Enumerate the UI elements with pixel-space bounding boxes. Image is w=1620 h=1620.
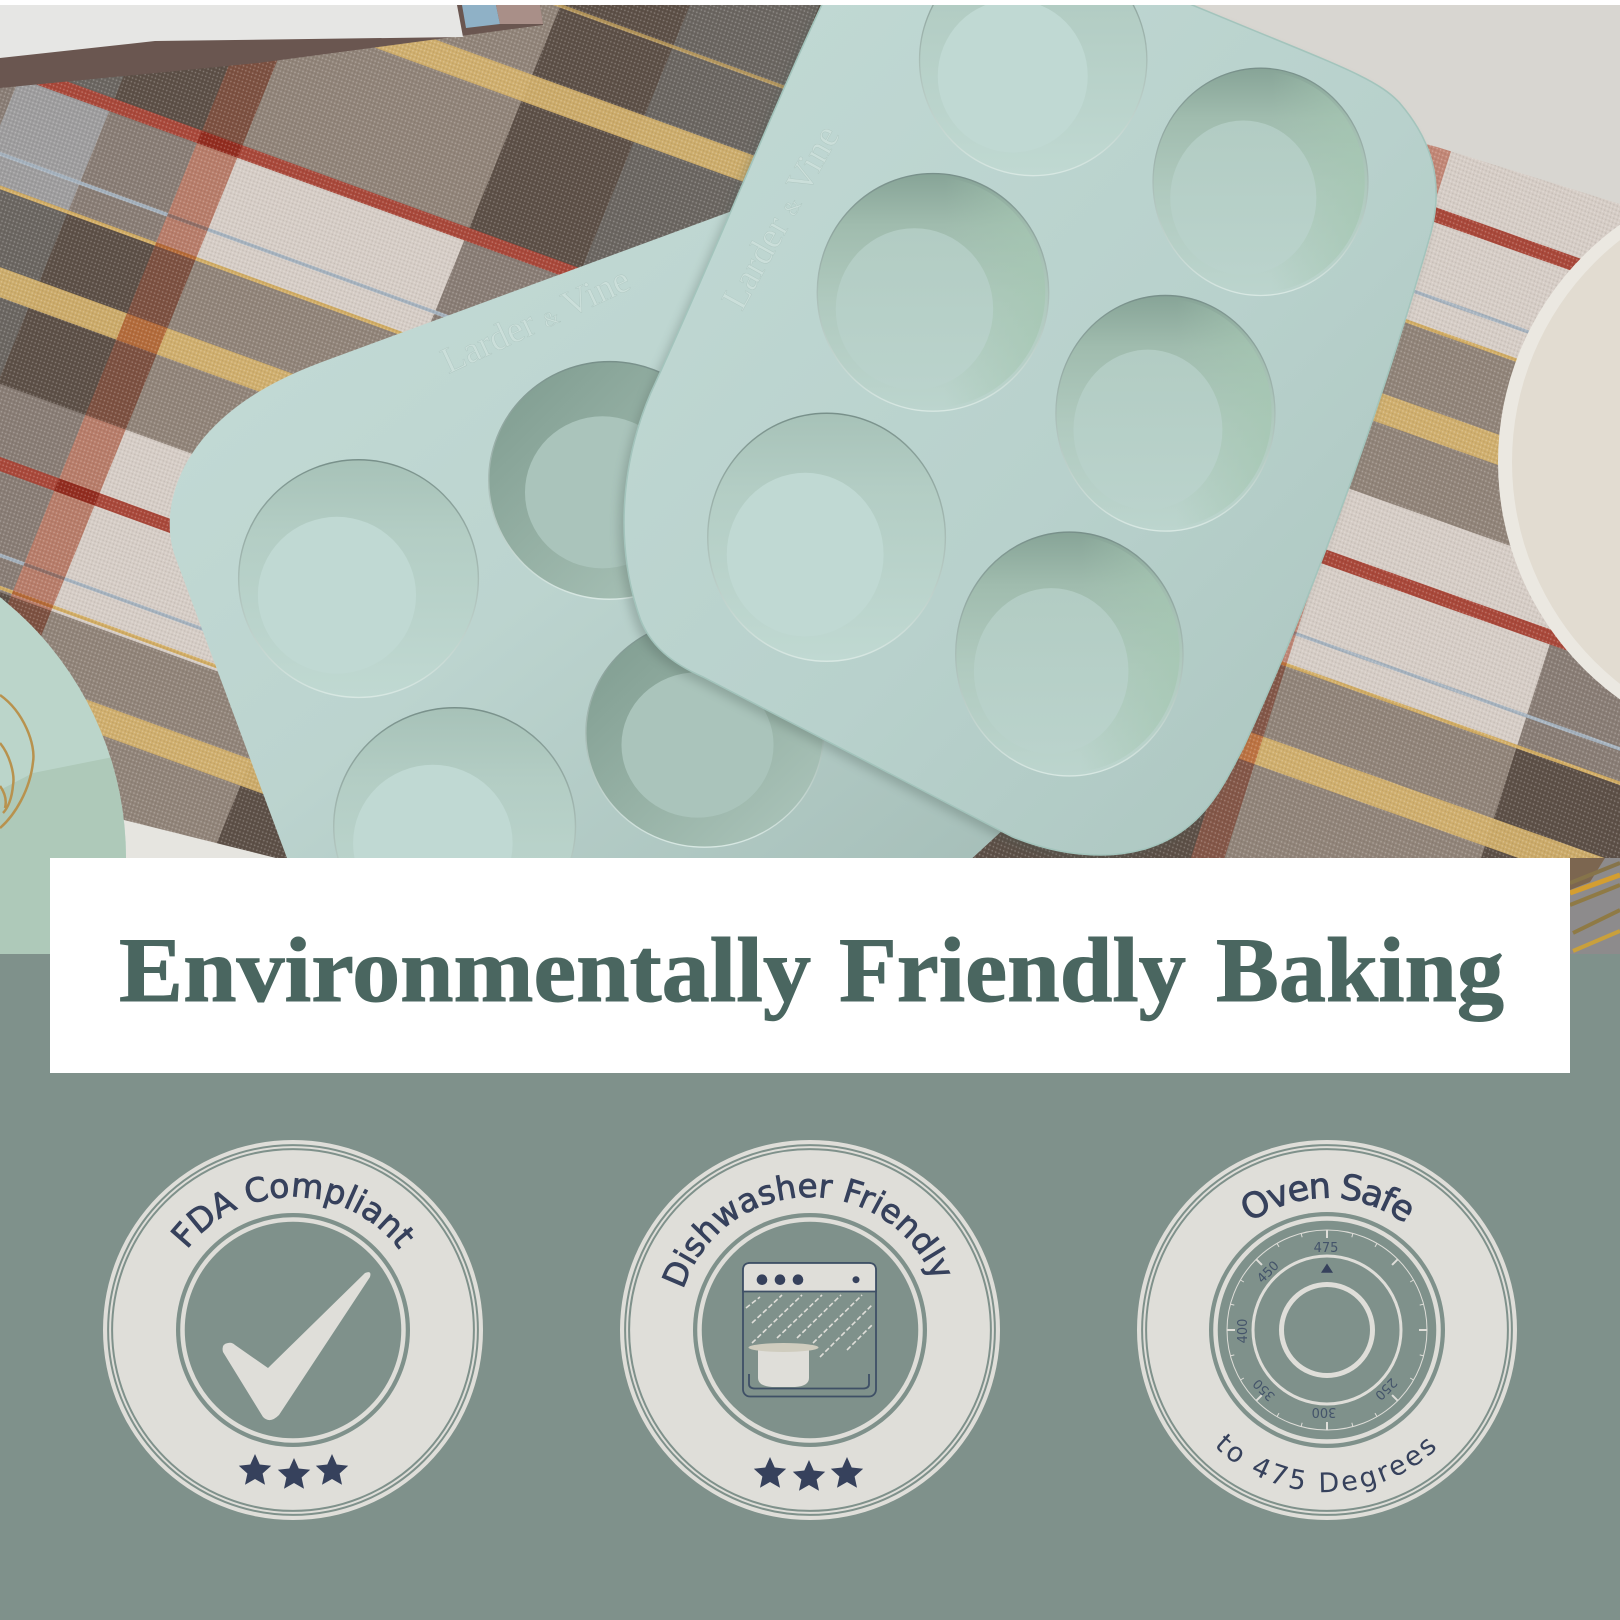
front pan cup 3	[817, 174, 1049, 411]
plaid cloth: left section	[0, 5, 821, 858]
icon: oven temperature dial: 475	[1314, 1241, 1338, 1256]
concrete surface top right	[1194, 5, 1620, 204]
badge: FDA Compliant	[103, 1140, 483, 1520]
title text: Friendly	[839, 919, 1186, 1021]
pan brand emboss: Larder & Vine	[714, 119, 848, 316]
title text: Environmentally	[119, 919, 811, 1021]
back pan cup shaded	[586, 620, 823, 847]
icon: check mark	[223, 1272, 370, 1420]
back pan cup left	[239, 460, 478, 697]
badge: Dishwasher Friendly	[620, 1140, 1000, 1520]
front pan cup 1	[920, 0, 1147, 176]
front pan cup 2	[1153, 68, 1368, 295]
icon: oven temperature dial: 300	[1312, 1404, 1336, 1419]
title text: Baking	[1216, 919, 1504, 1021]
large cream plate right	[1498, 224, 1620, 700]
back muffin pan	[170, 212, 1001, 858]
badge heading: Oven Safe	[1242, 1174, 1412, 1222]
white table surface lower left	[124, 820, 276, 858]
title banner	[50, 858, 1570, 1073]
icon: oven temperature dial: 450	[1254, 1258, 1283, 1287]
mint side plate with gold whisk	[0, 597, 126, 954]
title text	[119, 919, 1504, 1021]
icon: oven with pot	[743, 1263, 876, 1396]
front pan cup 5	[708, 413, 945, 661]
icon: oven temperature dial	[1227, 1230, 1427, 1430]
plaid cloth: right section	[972, 144, 1620, 858]
back pan cup lower	[333, 707, 576, 858]
back pan cup upper	[488, 360, 660, 600]
badge heading: Dishwasher Friendly	[662, 1174, 950, 1288]
three stars	[754, 1457, 863, 1491]
front muffin pan	[624, 0, 1436, 855]
gold whisk wires lower right	[1570, 858, 1620, 954]
three stars	[239, 1454, 348, 1489]
badge heading: FDA Compliant	[170, 1176, 414, 1250]
top white strip	[0, 0, 1620, 5]
open book top left	[0, 5, 543, 88]
photo: muffin pans on plaid cloth	[0, 5, 1620, 954]
front pan shadow	[619, 0, 1431, 860]
front pan cup 4	[1056, 295, 1275, 531]
icon: oven temperature dial: 400	[1236, 1319, 1251, 1343]
icon: oven temperature dial: 350	[1250, 1375, 1279, 1404]
icon: oven temperature dial: 250	[1371, 1374, 1400, 1403]
badge subheading: to 475 Degrees	[1217, 1434, 1436, 1492]
badge: Oven Safe	[1137, 1140, 1517, 1520]
front pan cup 6	[956, 532, 1183, 776]
pan brand emboss: Larder & Vine	[435, 259, 636, 382]
